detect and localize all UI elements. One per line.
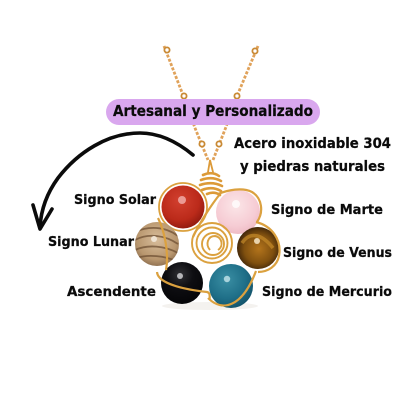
infographic [31, 46, 392, 310]
soft shadow [162, 302, 258, 310]
stone: obsidian [157, 262, 210, 304]
wire knot bail [200, 160, 222, 195]
label: material: y piedras naturales [240, 159, 385, 175]
heading pill: Artesanal y Personalizado [113, 102, 313, 120]
curved arrow [33, 133, 193, 229]
stone: apatite [208, 264, 256, 308]
heading pill [106, 99, 320, 125]
spiral wire [192, 194, 232, 263]
label: Signo Lunar: Signo Lunar [48, 235, 135, 250]
label: Signo de Marte: Signo de Marte [271, 203, 383, 218]
stone: rose quartz [216, 189, 261, 234]
label: Ascendente: Ascendente [67, 285, 156, 300]
necklace chain [164, 46, 258, 160]
label: material: Acero inoxidable 304 [234, 136, 391, 152]
label: material [234, 136, 391, 175]
stone: tiger eye [237, 222, 280, 272]
stone: red jasper [159, 183, 207, 231]
label: Signo Solar: Signo Solar [74, 193, 157, 208]
label: Signo de Venus: Signo de Venus [283, 246, 392, 261]
label: Signo de Mercurio: Signo de Mercurio [262, 285, 392, 300]
pendant [135, 160, 280, 310]
stone: picture jasper [135, 218, 179, 270]
